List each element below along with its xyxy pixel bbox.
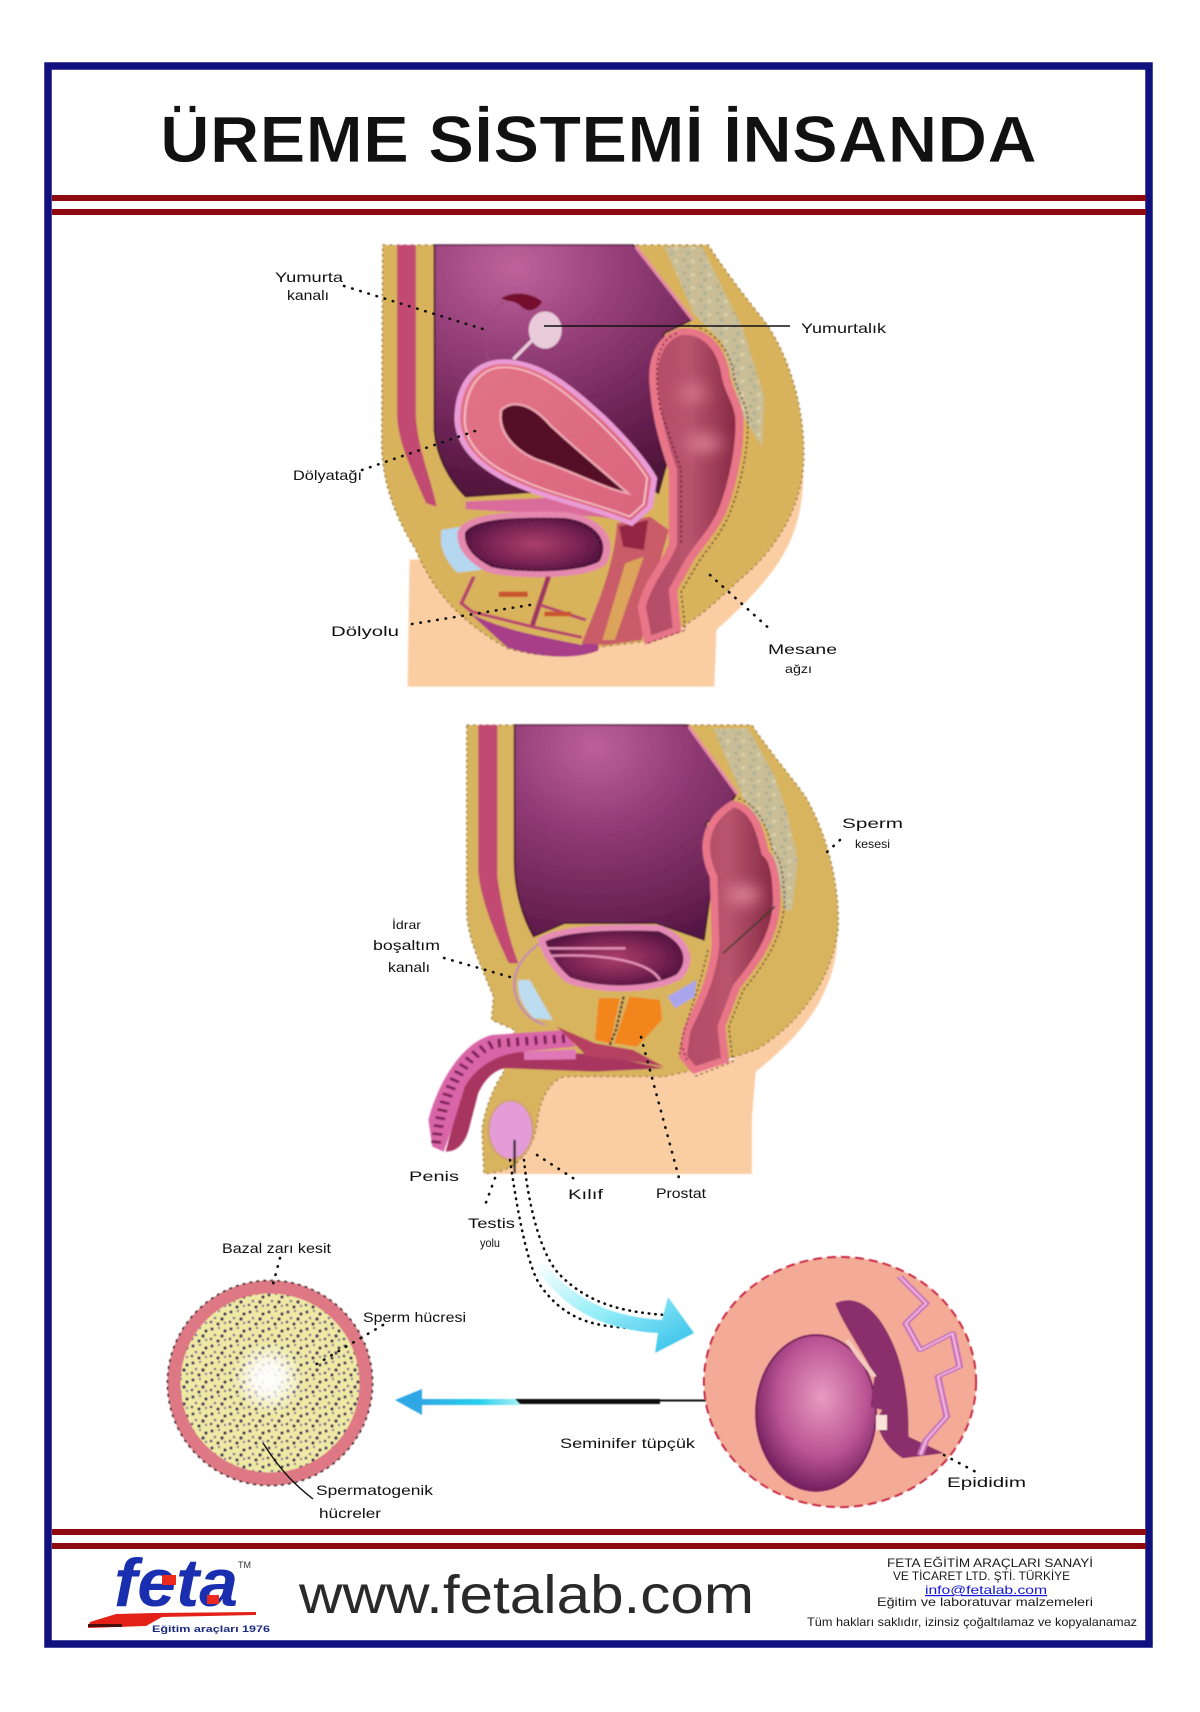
male fat layer <box>467 725 838 1173</box>
leader: seminal vesicle <box>826 840 840 853</box>
penis spongy texture <box>436 1038 568 1143</box>
label: epididim: Epididim <box>947 1474 1026 1490</box>
leader: scrotum <box>537 1155 576 1180</box>
label: yolu: yolu <box>480 1236 500 1250</box>
arrow leader <box>515 1399 719 1404</box>
label: hücreler: hücreler <box>319 1505 381 1521</box>
label: prostat: Prostat <box>656 1185 706 1201</box>
male spine tissue <box>714 728 798 910</box>
ovary <box>529 311 562 349</box>
cross section of tubule <box>168 1280 372 1486</box>
leader: uterus <box>362 430 478 470</box>
tubule outline <box>168 1280 372 1486</box>
testis body <box>756 1335 876 1491</box>
leader: epididymis <box>944 1455 976 1472</box>
tubule wall <box>174 1287 366 1479</box>
fimbriae <box>501 293 542 310</box>
leader: testis left <box>484 1178 495 1208</box>
contact link: info@fetalab.com <box>925 1583 1047 1597</box>
rectum diagonal line <box>723 907 775 953</box>
leader: spermatogenic cells <box>263 1443 313 1499</box>
label: mesane: Mesane <box>768 641 837 657</box>
footer double red rule <box>52 1529 1146 1549</box>
logo word: feta <box>114 1545 238 1621</box>
leader: lower right <box>710 575 773 632</box>
leader: sperm cell <box>315 1325 383 1365</box>
label: boşaltım: boşaltım <box>373 937 440 953</box>
diagram: testis and seminiferous tubule detail <box>168 1160 1026 1521</box>
penis <box>428 1030 576 1152</box>
female cavity edge <box>636 247 693 320</box>
female bladder dots <box>466 520 601 570</box>
male bladder <box>541 928 687 988</box>
vas deferens <box>900 1277 960 1455</box>
label: penis: Penis <box>409 1168 459 1184</box>
female tissue stripe <box>602 557 644 640</box>
contact line 4: Tüm hakları saklıdır, izinsiz çoğaltılamaz ve kopyalanamaz <box>807 1615 1137 1629</box>
female external tissue <box>470 613 598 657</box>
female spine tissue <box>665 247 764 447</box>
female bladder top band <box>466 497 619 520</box>
leader: fallopian tube <box>344 286 486 330</box>
prostate duct <box>606 997 624 1053</box>
testis in scrotum <box>489 1101 533 1159</box>
arrow shaft <box>420 1399 520 1405</box>
contact block <box>807 1555 1137 1629</box>
female perineal outlines <box>461 577 586 637</box>
label: testis: Testis <box>468 1215 515 1231</box>
female pubic bone <box>441 527 481 573</box>
label: idrar: İdrar <box>392 918 421 932</box>
leader: ovary <box>544 325 790 327</box>
female abdominal cavity <box>434 245 692 497</box>
label: sperm hücresi: Sperm hücresi <box>363 1309 466 1325</box>
male abdominal cavity <box>515 725 737 940</box>
slit <box>847 1340 875 1377</box>
bladder inner folds <box>545 948 660 980</box>
rectum outline <box>679 797 784 1077</box>
label: bazal zar: Bazal zarı kesit <box>222 1240 331 1256</box>
header double red rule <box>52 195 1146 215</box>
female body skin <box>408 443 803 687</box>
curved cyan arrow <box>533 1263 694 1353</box>
female urethra <box>532 577 549 627</box>
rectum <box>642 332 740 640</box>
logo trademark: TM <box>238 1560 251 1570</box>
uterus <box>457 362 654 523</box>
female muscle detail <box>619 520 648 550</box>
label: spermatogenik: Spermatogenik <box>316 1482 434 1498</box>
uterine cavity <box>501 404 628 493</box>
vas core <box>900 1277 960 1455</box>
testis stem <box>512 1140 518 1173</box>
logo: feta <box>88 1545 270 1634</box>
labels: female diagram <box>275 269 887 676</box>
label: kesesi: kesesi <box>855 837 890 851</box>
leader: urethra <box>444 958 510 977</box>
ovarian ligament <box>513 338 534 359</box>
female abdominal wall stripe <box>397 245 437 507</box>
label: kanalı: kanalı <box>287 287 329 303</box>
male cavity edge <box>689 727 737 794</box>
double dotted vessel <box>510 1160 665 1330</box>
label: yumurtalık: Yumurtalık <box>801 320 887 336</box>
urethra pink <box>524 1049 576 1060</box>
uterus inner contour <box>465 367 647 517</box>
title: ÜREME SİSTEMİ İNSANDA <box>160 102 1037 176</box>
leader: vagina <box>412 604 536 624</box>
logo swoosh <box>88 1612 256 1628</box>
label: seminifer tüpçük: Seminifer tüpçük <box>560 1435 696 1451</box>
label: yumurta kanalı: Yumurta <box>275 269 343 285</box>
label: sperm: Sperm <box>842 815 903 831</box>
seminal vesicle tissue <box>668 980 696 1008</box>
rectum highlight <box>729 886 759 904</box>
female red muscle marks <box>499 592 571 616</box>
rectum highlights <box>682 384 721 452</box>
pubic arc <box>514 943 545 1025</box>
logo tagline: Eğitim araçları 1976 <box>152 1624 270 1634</box>
tubule lumen <box>232 1342 304 1414</box>
fallopian tube <box>485 298 515 360</box>
female vaginal tube <box>582 517 669 645</box>
male pubic bone <box>518 980 553 1020</box>
straight cyan arrow <box>395 1389 719 1415</box>
female bladder <box>461 515 607 574</box>
diagram: male reproductive system <box>428 725 838 1174</box>
website url: www.fetalab.com <box>298 1565 754 1625</box>
rectum outline <box>648 325 748 643</box>
gap <box>876 1415 887 1430</box>
leader: wall <box>272 1258 280 1288</box>
male body skin <box>484 927 837 1174</box>
labels: male diagram <box>373 815 903 1250</box>
contact line 2: VE TİCARET LTD. ŞTİ. TÜRKİYE <box>893 1569 1070 1583</box>
label: kanalı: kanalı <box>388 959 430 975</box>
label: dölyatağı: Dölyatağı <box>293 467 362 483</box>
label: ağzı: ağzı <box>785 662 812 676</box>
logo dark bar <box>88 1624 122 1627</box>
rectum <box>683 804 777 1070</box>
contact line 3: Eğitim ve laboratuvar malzemeleri <box>877 1595 1093 1609</box>
leader: prostate <box>641 1037 679 1178</box>
epididymis <box>835 1300 944 1458</box>
contact line 1: FETA EĞİTİM ARAÇLARI SANAYİ <box>887 1555 1093 1570</box>
label: dölyolu: Dölyolu <box>331 623 399 639</box>
enlarged testis circle <box>704 1257 976 1507</box>
label: kılıf: Kılıf <box>568 1186 603 1202</box>
arrow head <box>395 1389 422 1415</box>
logo red accents <box>162 1575 219 1604</box>
urethra lower tissue <box>446 1052 664 1152</box>
prostate gland <box>595 997 662 1047</box>
corpus muscle <box>557 1027 664 1067</box>
female fat layer <box>382 245 804 656</box>
circle background <box>704 1257 976 1507</box>
male abdominal wall stripe <box>478 725 518 963</box>
diagram: female reproductive system <box>382 245 804 687</box>
